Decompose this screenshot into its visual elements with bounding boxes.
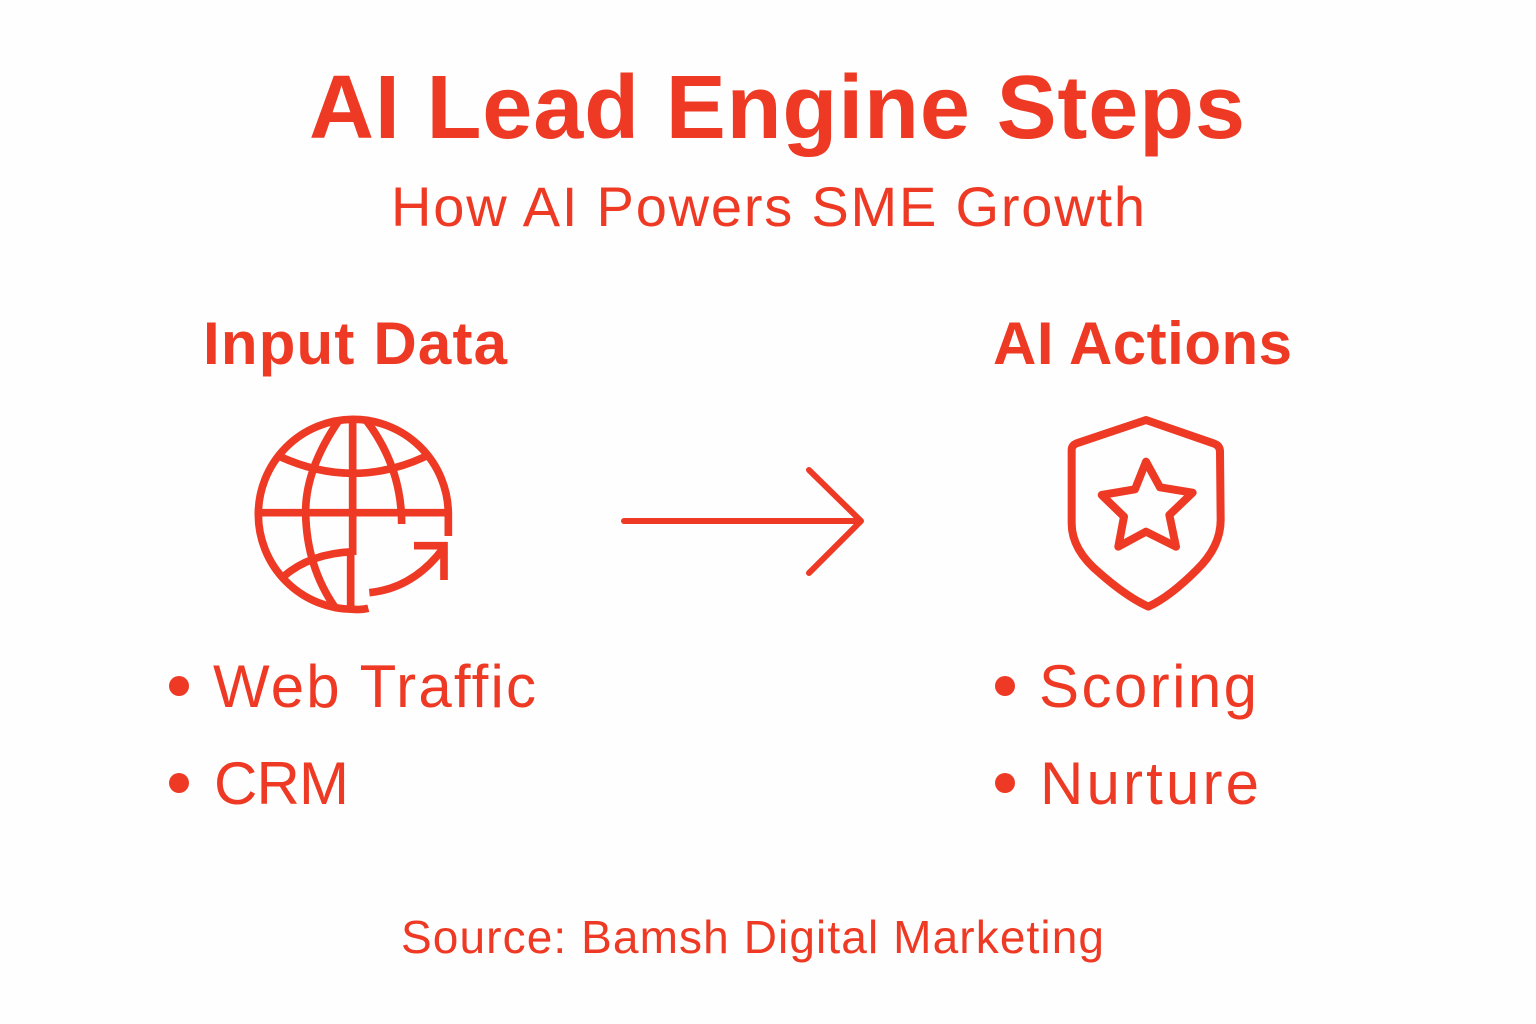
bullet: web traffic	[169, 676, 189, 696]
bullet: nurture	[995, 773, 1015, 793]
list: input data	[169, 653, 536, 817]
item: web traffic: Web Traffic	[213, 653, 536, 720]
item: nurture: Nurture	[1040, 750, 1259, 817]
item: scoring: Scoring	[1039, 653, 1257, 720]
subtitle: How AI Powers SME Growth	[391, 175, 1145, 238]
list: AI actions	[995, 653, 1259, 817]
title: AI Lead Engine Steps	[309, 58, 1245, 158]
heading: input data: Input Data	[203, 310, 508, 377]
item: CRM: CRM	[214, 750, 349, 817]
icon: shield with star	[1072, 420, 1221, 607]
arrow	[624, 470, 861, 573]
bullet: scoring	[995, 676, 1015, 696]
source: Source: Bamsh Digital Marketing	[401, 911, 1104, 963]
icon: globe with arrow	[258, 419, 448, 610]
bullet: CRM	[169, 773, 189, 793]
heading: AI actions: AI Actions	[993, 310, 1292, 377]
